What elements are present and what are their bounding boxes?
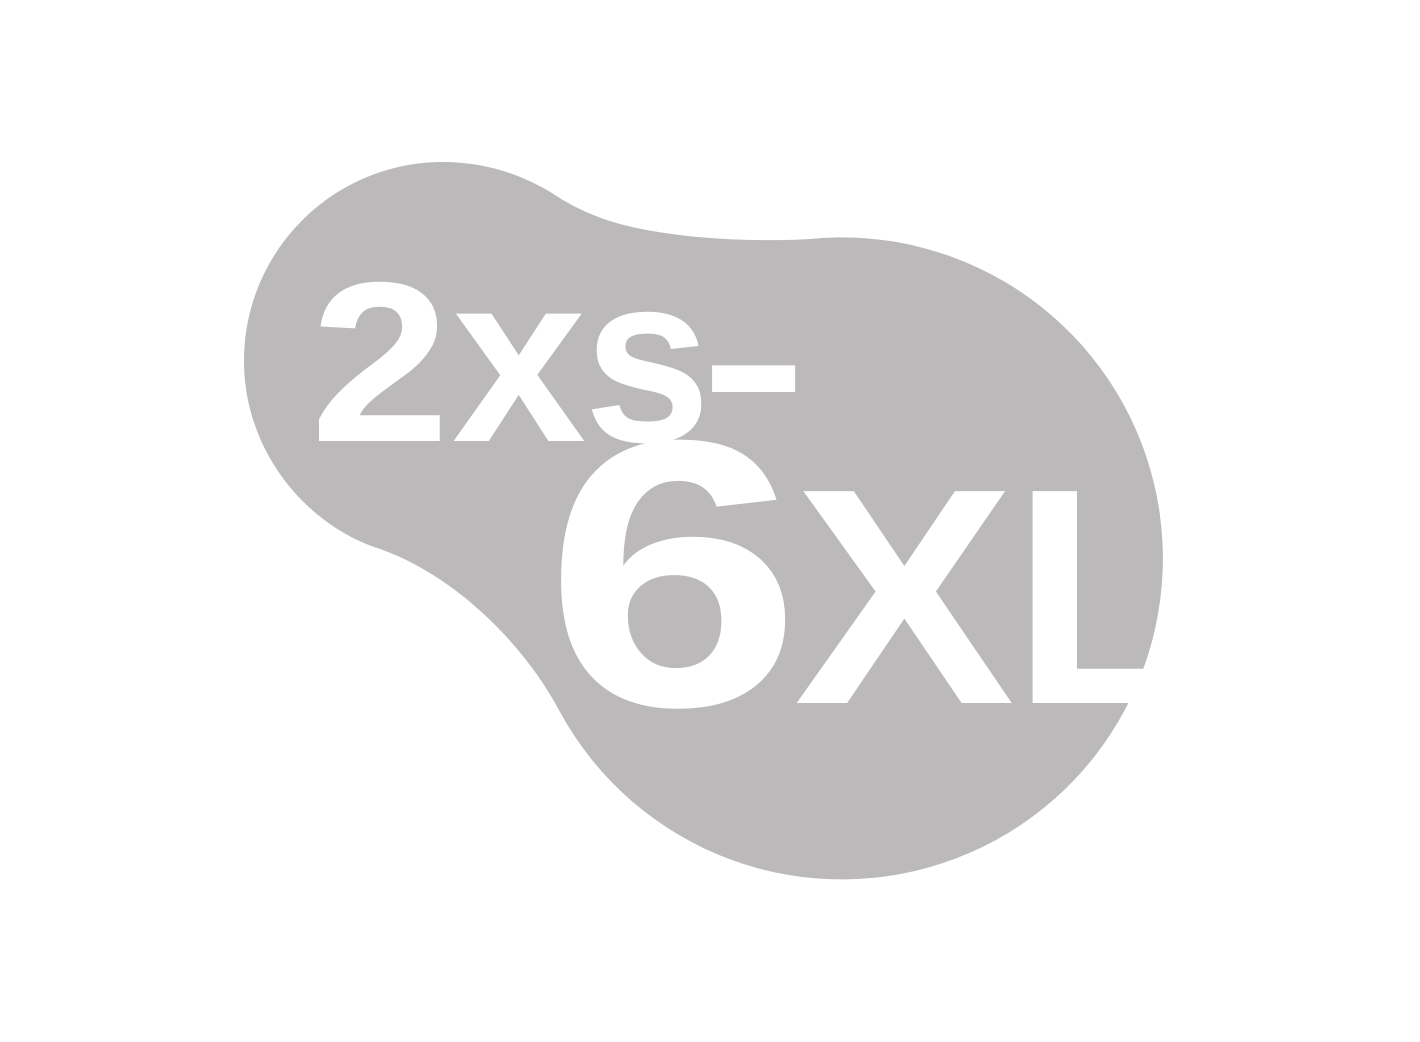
large text: 6XL (544, 361, 1200, 786)
large text: 6XL: 6 (544, 361, 802, 786)
large text: 6XL: X (794, 425, 1016, 768)
small text: 2xs-: s (584, 224, 711, 492)
small text: 2xs-: 2 (310, 235, 450, 490)
large text: 6XL: L (1012, 425, 1200, 769)
small text: 2xs-: - (697, 162, 810, 542)
size range label: 2xs-6XL (310, 162, 1200, 786)
small text: 2xs-: x (452, 224, 586, 493)
grey blob badge background (244, 162, 1163, 879)
small text: 2xs- (310, 162, 810, 542)
